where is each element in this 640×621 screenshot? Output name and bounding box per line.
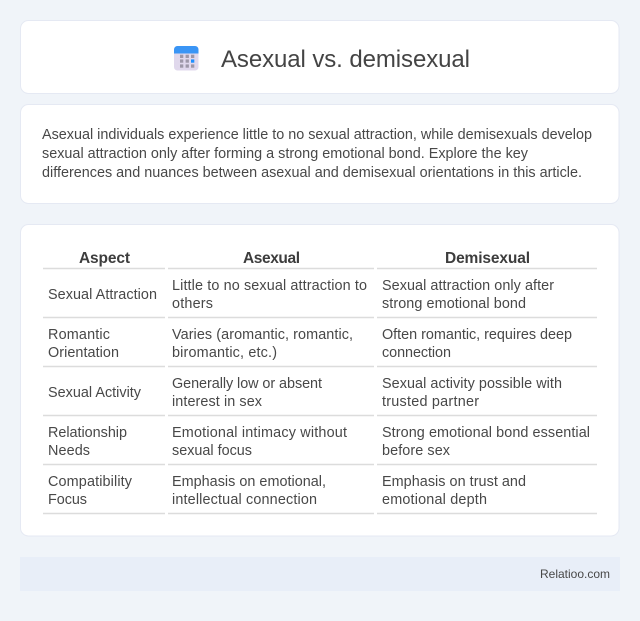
row: compatibility focus [48, 474, 526, 508]
row: relationship needs [48, 425, 590, 459]
row: romantic orientation: Often romantic, requires deep [382, 327, 572, 343]
intro text: differences and nuances between asexual and demisexual orientations in this article. [42, 165, 582, 181]
row: sexual activity: Generally low or absent [172, 376, 322, 392]
row: romantic orientation: connection [382, 345, 451, 361]
row: compatibility focus: emotional depth [382, 492, 487, 508]
row: relationship needs: sexual focus [172, 443, 252, 459]
row: sexual activity: Sexual activity possible with [382, 376, 562, 392]
panel: introduction [20, 104, 619, 204]
footer credit: Relatioo.com [540, 567, 610, 581]
table header: Asexual [243, 250, 300, 267]
row: compatibility focus: Emphasis on emotional, [172, 474, 326, 490]
row: sexual attraction [48, 278, 554, 312]
footer bar [20, 557, 620, 591]
row: compatibility focus: intellectual connection [172, 492, 317, 508]
intro text: sexual attraction only after forming a strong emotional bond. Explore the key [42, 146, 529, 162]
row: romantic orientation: Varies (aromantic, romantic, [172, 327, 353, 343]
row: romantic orientation [48, 327, 572, 361]
row: romantic orientation: biromantic, etc.) [172, 345, 277, 361]
row: relationship needs: Needs [48, 443, 90, 459]
row: compatibility focus: Emphasis on trust and [382, 474, 526, 490]
row: relationship needs: before sex [382, 443, 451, 459]
row: romantic orientation: Orientation [48, 345, 119, 361]
row: sexual attraction: Sexual attraction only after [382, 278, 554, 294]
row: sexual attraction: Little to no sexual attraction to [172, 278, 367, 294]
row: sexual attraction: others [172, 296, 213, 312]
row: sexual activity: Sexual Activity [48, 385, 142, 401]
row: compatibility focus: Focus [48, 492, 87, 508]
row: compatibility focus: Compatibility [48, 474, 133, 490]
row: sexual activity: trusted partner [382, 394, 479, 410]
intro text [42, 127, 592, 181]
row: sexual attraction: Sexual Attraction [48, 287, 157, 303]
panel: title card [20, 20, 619, 94]
panel: comparison table [20, 224, 619, 536]
row: sexual activity: interest in sex [172, 394, 263, 410]
intro text: Asexual individuals experience little to no sexual attraction, while demisexuals develop [42, 127, 592, 143]
row: relationship needs: Strong emotional bond essential [382, 425, 590, 441]
table header [79, 250, 530, 267]
icon: calendar [174, 46, 198, 70]
table header: Demisexual [445, 250, 530, 267]
title: Asexual vs. demisexual [221, 46, 470, 73]
row: romantic orientation: Romantic [48, 327, 110, 343]
table header: Aspect [79, 250, 130, 267]
row: sexual attraction: strong emotional bond [382, 296, 526, 312]
row: relationship needs: Emotional intimacy without [172, 425, 347, 441]
row: relationship needs: Relationship [48, 425, 127, 441]
row: sexual activity [48, 376, 562, 410]
